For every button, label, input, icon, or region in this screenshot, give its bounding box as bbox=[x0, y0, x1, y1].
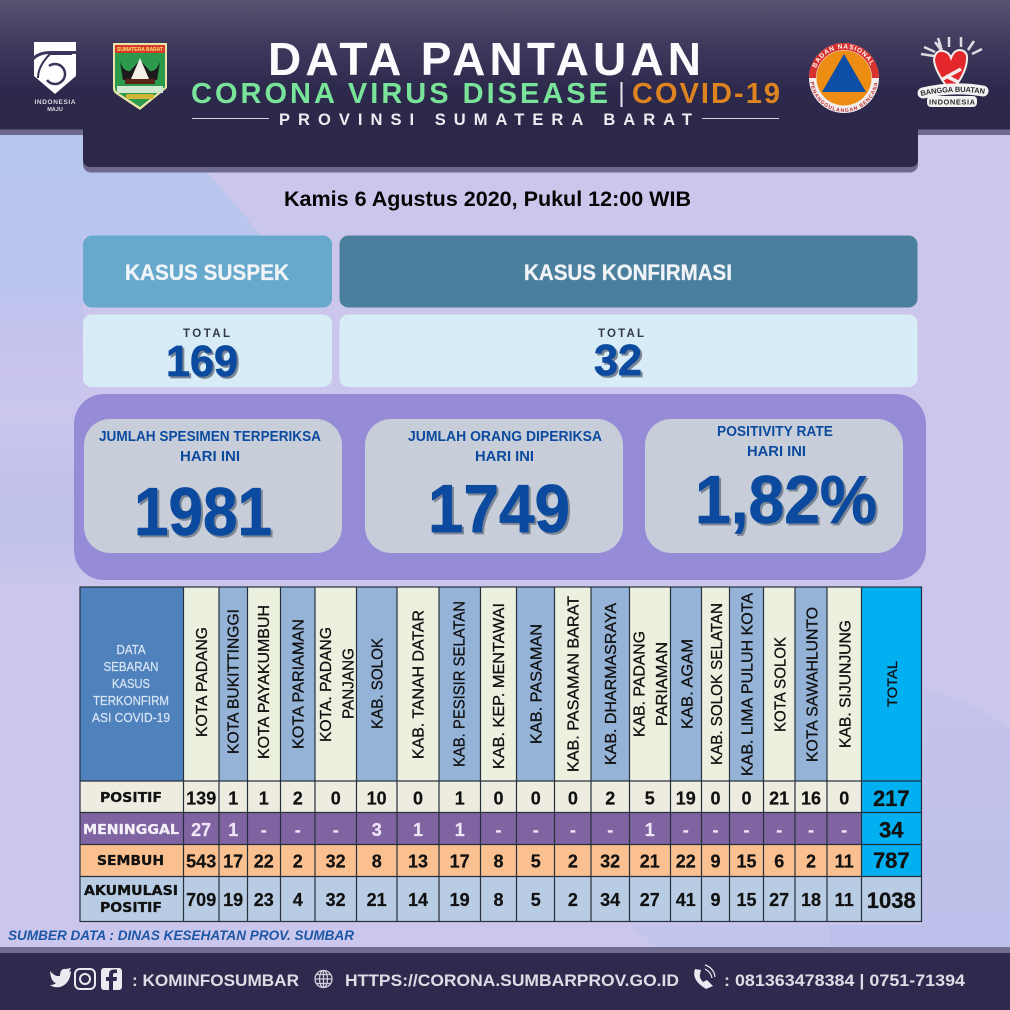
row: akumulasi positif: 19 bbox=[450, 890, 470, 910]
row: akumulasi positif: 18 bbox=[801, 890, 821, 910]
row: sembuh bbox=[80, 844, 922, 876]
table district header row: KOTA SAWAHLUNTO bbox=[804, 607, 822, 762]
row: positif: POSITIF bbox=[100, 790, 162, 806]
row: meninggal: - bbox=[841, 820, 847, 840]
row: positif: 10 bbox=[367, 788, 387, 808]
icon: BNPB logo: PENANGGULANGAN BENCANA bbox=[810, 82, 878, 112]
title: DATA PANTAUAN bbox=[268, 33, 701, 85]
card: positivity rate: 1,82% bbox=[695, 462, 877, 538]
row: sembuh: 2 bbox=[568, 852, 578, 872]
table header cell: TERKONFIRM bbox=[93, 693, 169, 708]
row: positif: 0 bbox=[413, 788, 423, 808]
row: sembuh: 5 bbox=[531, 852, 541, 872]
date line: Kamis 6 Agustus 2020, Pukul 12:00 WIB bbox=[284, 188, 691, 211]
row: meninggal: MENINGGAL bbox=[83, 822, 179, 838]
row: meninggal: 1 bbox=[228, 820, 238, 840]
text: phone numbers: : 081363478384 | 0751-71394 bbox=[724, 971, 966, 990]
row: akumulasi positif: 23 bbox=[254, 890, 274, 910]
card: positivity rate: POSITIVITY RATE bbox=[717, 424, 833, 440]
row: positif: 0 bbox=[839, 788, 849, 808]
row: meninggal bbox=[80, 812, 922, 844]
row: meninggal: - bbox=[261, 820, 267, 840]
table district header row: KAB. LIMA PULUH KOTA bbox=[740, 592, 756, 776]
title bbox=[191, 33, 780, 129]
row: meninggal: 34 bbox=[879, 818, 904, 842]
row: sembuh: 21 bbox=[640, 852, 660, 872]
row: akumulasi positif: AKUMULASI bbox=[84, 883, 178, 899]
table district header row: KAB. PADANG bbox=[632, 631, 648, 737]
icon: Indonesia Maju 75 logo: INDONESIA bbox=[34, 99, 76, 106]
row: positif bbox=[80, 781, 922, 812]
icon: BNPB logo bbox=[809, 43, 879, 113]
panel: total konfirmasi: TOTAL bbox=[598, 328, 644, 340]
icon: facebook bbox=[101, 968, 122, 990]
row: akumulasi positif: POSITIF bbox=[100, 900, 162, 916]
card: jumlah orang: HARI INI bbox=[475, 449, 534, 465]
row: sembuh: 13 bbox=[408, 852, 428, 872]
table district header row: KAB. KEP. MENTAWAI bbox=[491, 603, 508, 769]
icon: twitter bbox=[50, 968, 71, 987]
table district header row: KOTA BUKITTINGGI bbox=[226, 609, 242, 754]
row: akumulasi positif: 11 bbox=[835, 890, 854, 910]
table header cell: DATA bbox=[116, 642, 146, 657]
row: akumulasi positif: 19 bbox=[223, 890, 243, 910]
icon: Indonesia Maju 75 logo bbox=[34, 42, 76, 113]
row: meninggal: 27 bbox=[191, 820, 211, 840]
table district header row: KOTA. PADANG bbox=[318, 627, 335, 742]
row: positif: 0 bbox=[568, 788, 578, 808]
row: positif: 1 bbox=[455, 788, 465, 808]
row: positif: 0 bbox=[741, 788, 752, 808]
row: meninggal: - bbox=[712, 820, 718, 840]
card: jumlah spesimen: JUMLAH SPESIMEN TERPERIKSA bbox=[99, 429, 321, 445]
panel: kasus konfirmasi: KASUS KONFIRMASI bbox=[524, 260, 732, 285]
row: meninggal: - bbox=[607, 820, 613, 840]
card: jumlah orang bbox=[365, 419, 623, 553]
row: sembuh: 8 bbox=[372, 852, 382, 872]
title: CORONA VIRUS DISEASE bbox=[191, 78, 608, 110]
table district header row: KAB. TANAH DATAR bbox=[410, 610, 428, 759]
row: akumulasi positif: 709 bbox=[186, 890, 216, 910]
row: positif: 16 bbox=[801, 788, 821, 808]
panel: total suspek: 169 bbox=[166, 337, 238, 386]
row: sembuh: 15 bbox=[736, 852, 757, 872]
table district header row: KOTA SOLOK bbox=[772, 636, 790, 732]
row: positif: 21 bbox=[769, 788, 789, 808]
row: akumulasi positif bbox=[80, 876, 922, 922]
row: akumulasi positif: 32 bbox=[326, 890, 346, 910]
table district header row: KAB. PASAMAN bbox=[528, 624, 546, 744]
row: sembuh: 8 bbox=[493, 852, 504, 872]
row: sembuh: SEMBUH bbox=[97, 853, 164, 869]
row: akumulasi positif: 41 bbox=[676, 890, 696, 910]
panel: pemeriksaan hari ini bbox=[74, 394, 926, 580]
row: positif: 139 bbox=[186, 788, 216, 808]
table district header row: KAB. DHARMASRAYA bbox=[603, 602, 620, 765]
row: akumulasi positif: 21 bbox=[367, 890, 387, 910]
row: sembuh: 6 bbox=[774, 852, 784, 872]
row: sembuh: 22 bbox=[254, 852, 274, 872]
table district header row: PANJANG bbox=[340, 648, 358, 719]
row: akumulasi positif: 5 bbox=[531, 890, 541, 910]
card: positivity rate bbox=[645, 419, 903, 553]
table district header row: KOTA PADANG bbox=[194, 627, 211, 737]
row: akumulasi positif: 2 bbox=[568, 890, 578, 910]
icon: Bangga Buatan Indonesia heart: BANGGA BUATAN bbox=[920, 86, 985, 96]
icon: Sumatera Barat coat of arms: SUMATERA BARAT bbox=[117, 47, 163, 53]
table district header row: KAB. PASAMAN BARAT bbox=[566, 595, 582, 772]
panel: total konfirmasi bbox=[340, 314, 918, 387]
row: akumulasi positif: 4 bbox=[293, 890, 303, 910]
row: akumulasi positif: 15 bbox=[736, 890, 757, 910]
row: positif: 5 bbox=[645, 788, 655, 808]
row: meninggal: 1 bbox=[645, 820, 655, 840]
icon: BNPB logo: BADAN NASIONAL bbox=[812, 44, 874, 68]
row: meninggal: 1 bbox=[413, 820, 423, 840]
table district header row: KAB. AGAM bbox=[680, 639, 696, 729]
panel: kasus konfirmasi bbox=[340, 236, 918, 308]
table district header row: TOTAL bbox=[884, 661, 900, 707]
header band bbox=[0, 0, 1010, 172]
row: meninggal: - bbox=[496, 820, 502, 840]
row: meninggal: - bbox=[333, 820, 339, 840]
row: akumulasi positif: 27 bbox=[769, 890, 789, 910]
row: positif: 1 bbox=[228, 788, 238, 808]
row: positif: 217 bbox=[873, 786, 910, 811]
panel: total suspek bbox=[83, 314, 332, 387]
card: jumlah orang: 1749 bbox=[428, 471, 570, 547]
icon: Bangga Buatan Indonesia heart bbox=[918, 37, 988, 107]
row: positif: 19 bbox=[676, 788, 696, 808]
title: PROVINSI SUMATERA BARAT bbox=[279, 111, 692, 129]
row: positif: 0 bbox=[531, 788, 541, 808]
icon: globe bbox=[315, 970, 332, 988]
footer band bbox=[0, 947, 1010, 1010]
panel: total konfirmasi: 32 bbox=[594, 336, 642, 385]
row: akumulasi positif: 34 bbox=[600, 890, 620, 910]
row: akumulasi positif: 8 bbox=[493, 890, 504, 910]
card: jumlah spesimen bbox=[84, 419, 342, 553]
row: sembuh: 17 bbox=[450, 852, 470, 872]
row: meninggal: - bbox=[683, 820, 689, 840]
table district header row: KAB. SIJUNJUNG bbox=[838, 620, 854, 748]
panel: kasus suspek bbox=[83, 236, 332, 308]
table district header row: KAB. SOLOK SELATAN bbox=[709, 603, 726, 765]
row: meninggal: - bbox=[776, 820, 782, 840]
icon: Indonesia Maju 75 logo: MAJU bbox=[47, 107, 63, 113]
panel: kasus suspek: KASUS SUSPEK bbox=[125, 260, 289, 285]
text: website: HTTPS://CORONA.SUMBARPROV.GO.ID bbox=[345, 971, 679, 990]
row: sembuh: 543 bbox=[186, 852, 216, 872]
card: positivity rate: HARI INI bbox=[747, 444, 806, 460]
table district header row: PARIAMAN bbox=[654, 642, 671, 726]
row: sembuh: 32 bbox=[600, 852, 620, 872]
table district header row: KOTA PARIAMAN bbox=[290, 619, 308, 749]
title: COVID-19 bbox=[632, 78, 780, 110]
row: sembuh: 22 bbox=[676, 852, 696, 872]
row: meninggal: - bbox=[744, 820, 750, 840]
source note: SUMBER DATA : DINAS KESEHATAN PROV. SUMBAR bbox=[8, 928, 354, 943]
row: meninggal: - bbox=[570, 820, 576, 840]
row: positif: 0 bbox=[493, 788, 504, 808]
row: akumulasi positif: 14 bbox=[408, 890, 428, 910]
row: meninggal: 1 bbox=[455, 820, 465, 840]
card: jumlah spesimen: 1981 bbox=[134, 474, 272, 550]
text: social handle: : KOMINFOSUMBAR bbox=[132, 971, 299, 990]
row: sembuh: 11 bbox=[835, 852, 854, 872]
row: positif: 0 bbox=[331, 788, 341, 808]
table district header row: KAB. PESISIR SELATAN bbox=[452, 601, 468, 767]
card: jumlah spesimen: HARI INI bbox=[180, 449, 240, 465]
row: akumulasi positif: 27 bbox=[640, 890, 660, 910]
row: positif: 0 bbox=[710, 788, 721, 808]
row: sembuh: 2 bbox=[806, 852, 816, 872]
row: positif: 1 bbox=[259, 788, 269, 808]
table header cell: SEBARAN bbox=[104, 659, 158, 674]
panel: total suspek: TOTAL bbox=[183, 328, 230, 340]
row: meninggal: - bbox=[808, 820, 814, 840]
icon: instagram bbox=[75, 969, 95, 989]
row: meninggal: - bbox=[295, 820, 301, 840]
row: sembuh: 17 bbox=[223, 852, 243, 872]
row: sembuh: 32 bbox=[326, 852, 346, 872]
row: akumulasi positif: 1038 bbox=[867, 888, 916, 913]
icon: phone bbox=[694, 965, 715, 989]
icon: Sumatera Barat coat of arms bbox=[113, 43, 167, 110]
row: positif: 2 bbox=[605, 788, 615, 808]
row: sembuh: 787 bbox=[873, 848, 910, 873]
table district header row: KOTA PAYAKUMBUH bbox=[256, 605, 273, 759]
icon: Bangga Buatan Indonesia heart: INDONESIA bbox=[929, 98, 976, 106]
table header cell: KASUS bbox=[112, 676, 150, 691]
row: akumulasi positif: 9 bbox=[710, 890, 721, 910]
row: meninggal: - bbox=[533, 820, 539, 840]
row: meninggal: 3 bbox=[372, 820, 382, 840]
table district header row bbox=[184, 587, 922, 781]
table: data sebaran kasus bbox=[80, 587, 922, 922]
table header cell: ASI COVID-19 bbox=[92, 710, 170, 725]
row: sembuh: 2 bbox=[293, 852, 303, 872]
row: positif: 2 bbox=[293, 788, 303, 808]
card: jumlah orang: JUMLAH ORANG DIPERIKSA bbox=[408, 429, 603, 445]
table header cell bbox=[80, 587, 184, 781]
table district header row: KAB. SOLOK bbox=[370, 637, 386, 729]
row: sembuh: 9 bbox=[710, 852, 721, 872]
